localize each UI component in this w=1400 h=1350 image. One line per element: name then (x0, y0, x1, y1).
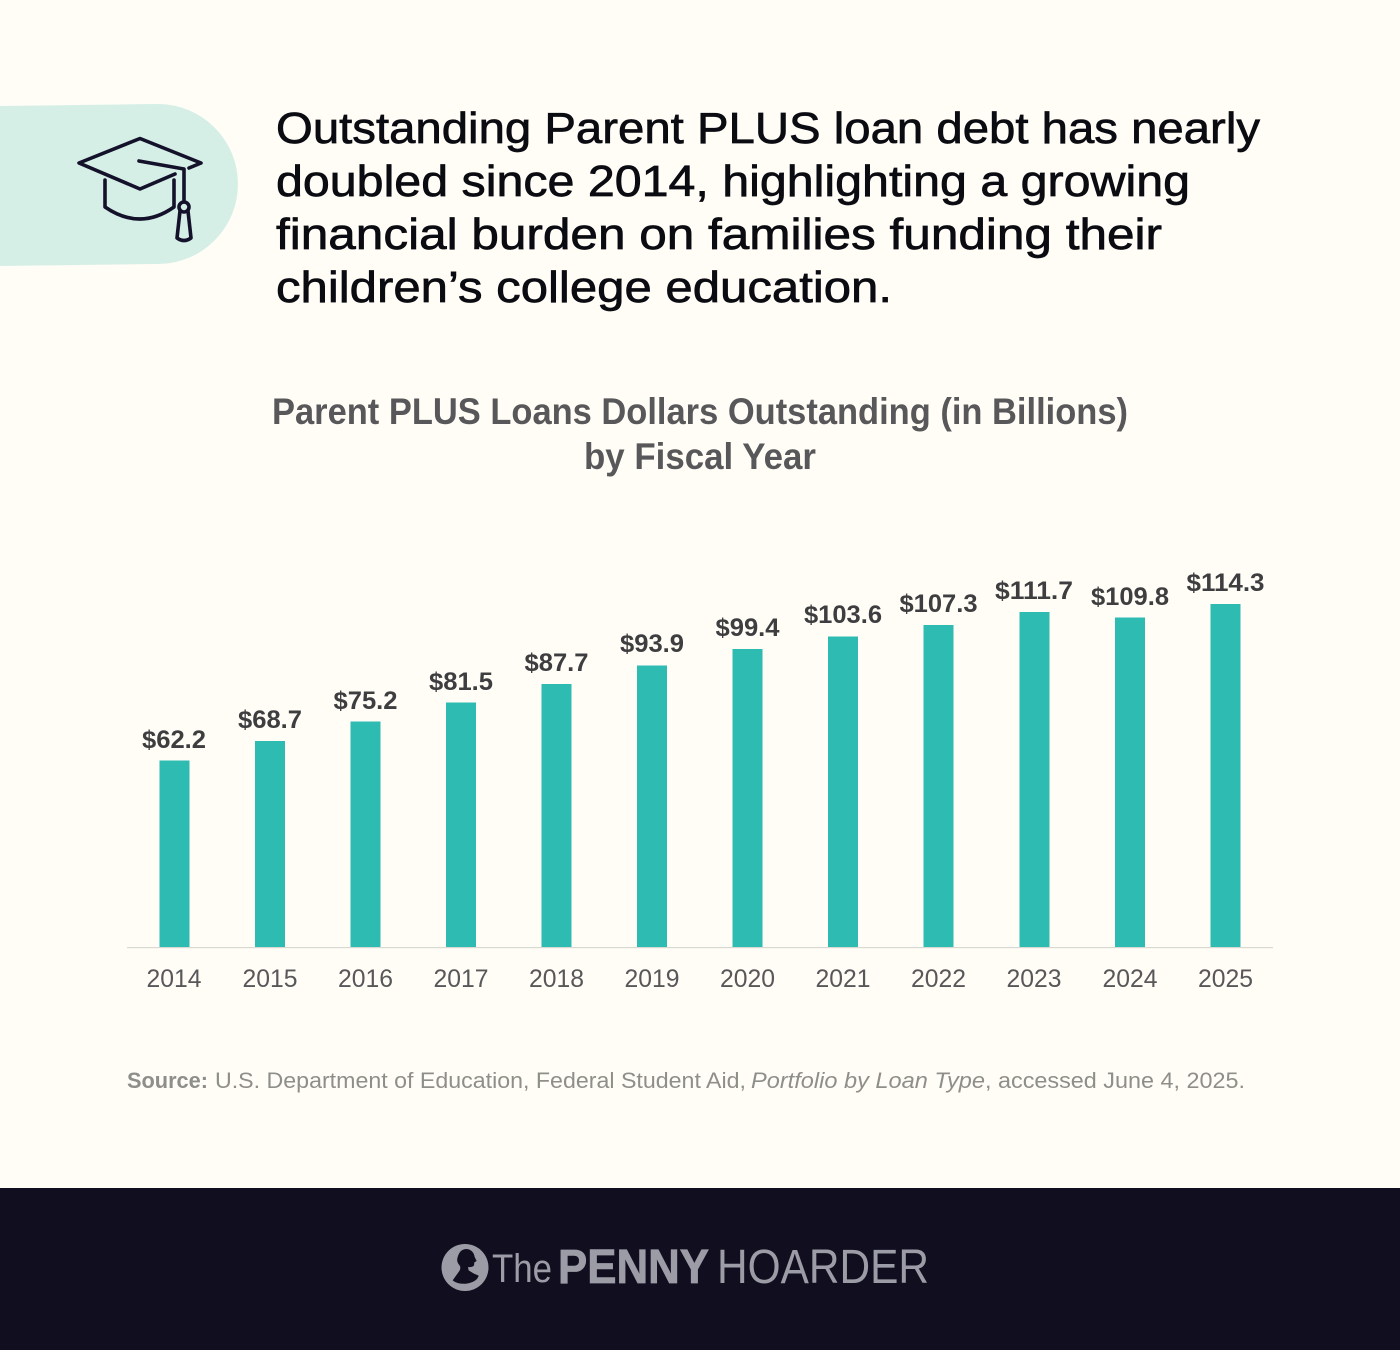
headline: financial burden on families funding their (276, 210, 1162, 259)
headline: Outstanding Parent PLUS loan debt has nearly (276, 104, 1260, 153)
value labels: $107.3 (900, 590, 978, 618)
bars (160, 604, 1240, 947)
source note: , accessed June 4, 2025. (985, 1068, 1245, 1093)
icon: graduation cap (79, 138, 201, 240)
chart title: Parent PLUS Loans Dollars Outstanding (in Billions) (272, 391, 1128, 432)
year labels: 2021 (816, 965, 870, 993)
value labels: $75.2 (334, 687, 398, 715)
year labels: 2018 (529, 965, 584, 993)
icon panel: mint pill with graduation cap (0, 104, 238, 266)
year labels: 2020 (720, 965, 775, 993)
value labels: $93.9 (620, 630, 684, 658)
year labels: 2023 (1006, 965, 1062, 993)
value labels: $109.8 (1091, 583, 1169, 611)
logo wordmark (492, 1241, 929, 1294)
value labels: $114.3 (1186, 569, 1264, 597)
headline: doubled since 2014, highlighting a growing (276, 157, 1190, 206)
year labels: 2015 (242, 965, 298, 993)
headline: children’s college education. (276, 263, 892, 312)
year labels (146, 965, 1253, 993)
value labels: $103.6 (804, 601, 882, 629)
logo wordmark: The (492, 1247, 552, 1291)
year labels: 2014 (146, 965, 202, 993)
logo: coin with silhouette (442, 1244, 488, 1291)
logo wordmark: PENNY (558, 1241, 709, 1294)
axis line (127, 947, 1273, 948)
value labels: $81.5 (429, 668, 493, 696)
year labels: 2017 (434, 965, 488, 993)
value labels: $99.4 (716, 614, 780, 642)
year labels: 2025 (1198, 965, 1253, 993)
value labels (142, 569, 1264, 754)
year labels: 2024 (1102, 965, 1158, 993)
value labels: $62.2 (142, 726, 206, 754)
value labels: $111.7 (995, 577, 1073, 605)
source note: U.S. Department of Education, Federal Student Aid, (215, 1068, 746, 1093)
source note: Source: (127, 1068, 208, 1093)
year labels: 2022 (911, 965, 966, 993)
logo wordmark: HOARDER (717, 1241, 929, 1294)
bar chart (127, 569, 1273, 993)
footer band with logo (0, 1188, 1400, 1350)
headline (276, 104, 1260, 312)
chart title: by Fiscal Year (584, 436, 816, 477)
source note: Portfolio by Loan Type (751, 1068, 985, 1093)
source note (127, 1068, 1245, 1093)
year labels: 2019 (624, 965, 680, 993)
chart title (272, 391, 1128, 477)
value labels: $87.7 (524, 649, 588, 677)
value labels: $68.7 (238, 706, 302, 734)
year labels: 2016 (338, 965, 393, 993)
